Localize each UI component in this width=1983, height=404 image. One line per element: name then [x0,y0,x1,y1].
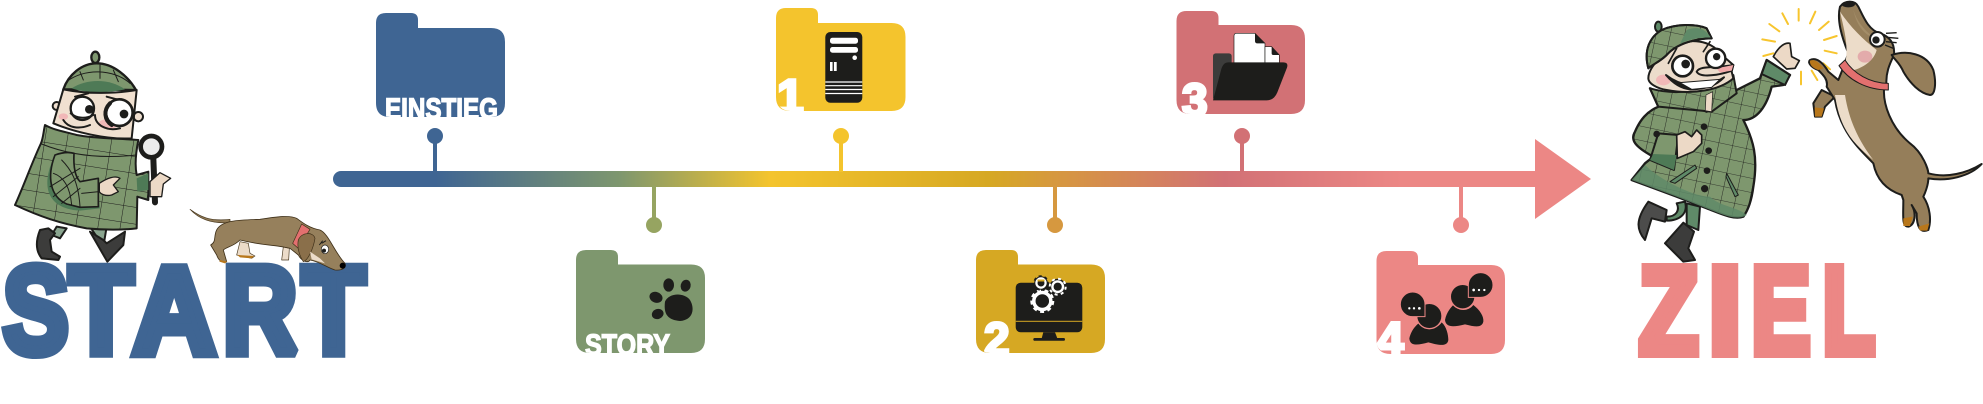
illustration: jumping dachshund [1809,1,1982,231]
timeline arrow [333,139,1591,219]
coat [15,125,148,230]
coat [1632,60,1790,218]
pin: Story [646,186,662,233]
panel: folder 1 [776,8,906,111]
panel: folder 2 [976,250,1105,353]
icon: paw [648,278,693,321]
pin: Einstieg [427,128,443,172]
panel: folder Story [576,250,705,362]
heading: START: T [69,243,133,380]
heading: START: A [133,243,216,380]
number 1: 1 [777,71,804,124]
icon: people with speech bubbles [1400,273,1493,345]
heading: ZIEL: I [1709,243,1741,380]
legs and boots [37,227,125,262]
head [53,89,143,139]
icon: computer tower [825,32,862,103]
pin: 2 [1047,186,1063,233]
heading: START: R [223,243,297,380]
heading: START: S [3,243,69,380]
hands [1677,43,1799,158]
number 2: 2 [984,313,1010,365]
label: STORY: STORY [585,329,670,362]
number 3: 3 [1182,74,1208,126]
illustration: cheering detective [1632,22,1799,262]
illustration: dachshund sniffing [190,209,346,270]
number 4: 4 [1377,314,1404,367]
hand on coat [99,177,120,195]
illustration: detective walking with magnifying glass [15,52,171,262]
pin: 1 [833,128,849,172]
heading: ZIEL: L [1822,243,1875,380]
pin: 3 [1234,128,1250,172]
legs and boots [1639,202,1700,262]
heading: START: T [302,243,365,380]
panel: folder 3 [1176,11,1305,114]
heading: ZIEL: E [1751,243,1810,380]
label: EINSTIEG: EINSTIEG [385,93,498,126]
icon: high-five spark rays [1762,9,1837,84]
panel: folder Einstieg [376,13,505,126]
head and hat [1647,22,1733,92]
pin: 4 [1453,186,1469,233]
panel: folder 4 [1376,251,1505,354]
pompon and hat [63,52,136,92]
icon: monitor with gears [1016,276,1082,341]
heading: ZIEL: Z [1639,243,1698,380]
icon: open folder with documents [1213,33,1287,100]
magnifying glass and hand [141,136,171,202]
